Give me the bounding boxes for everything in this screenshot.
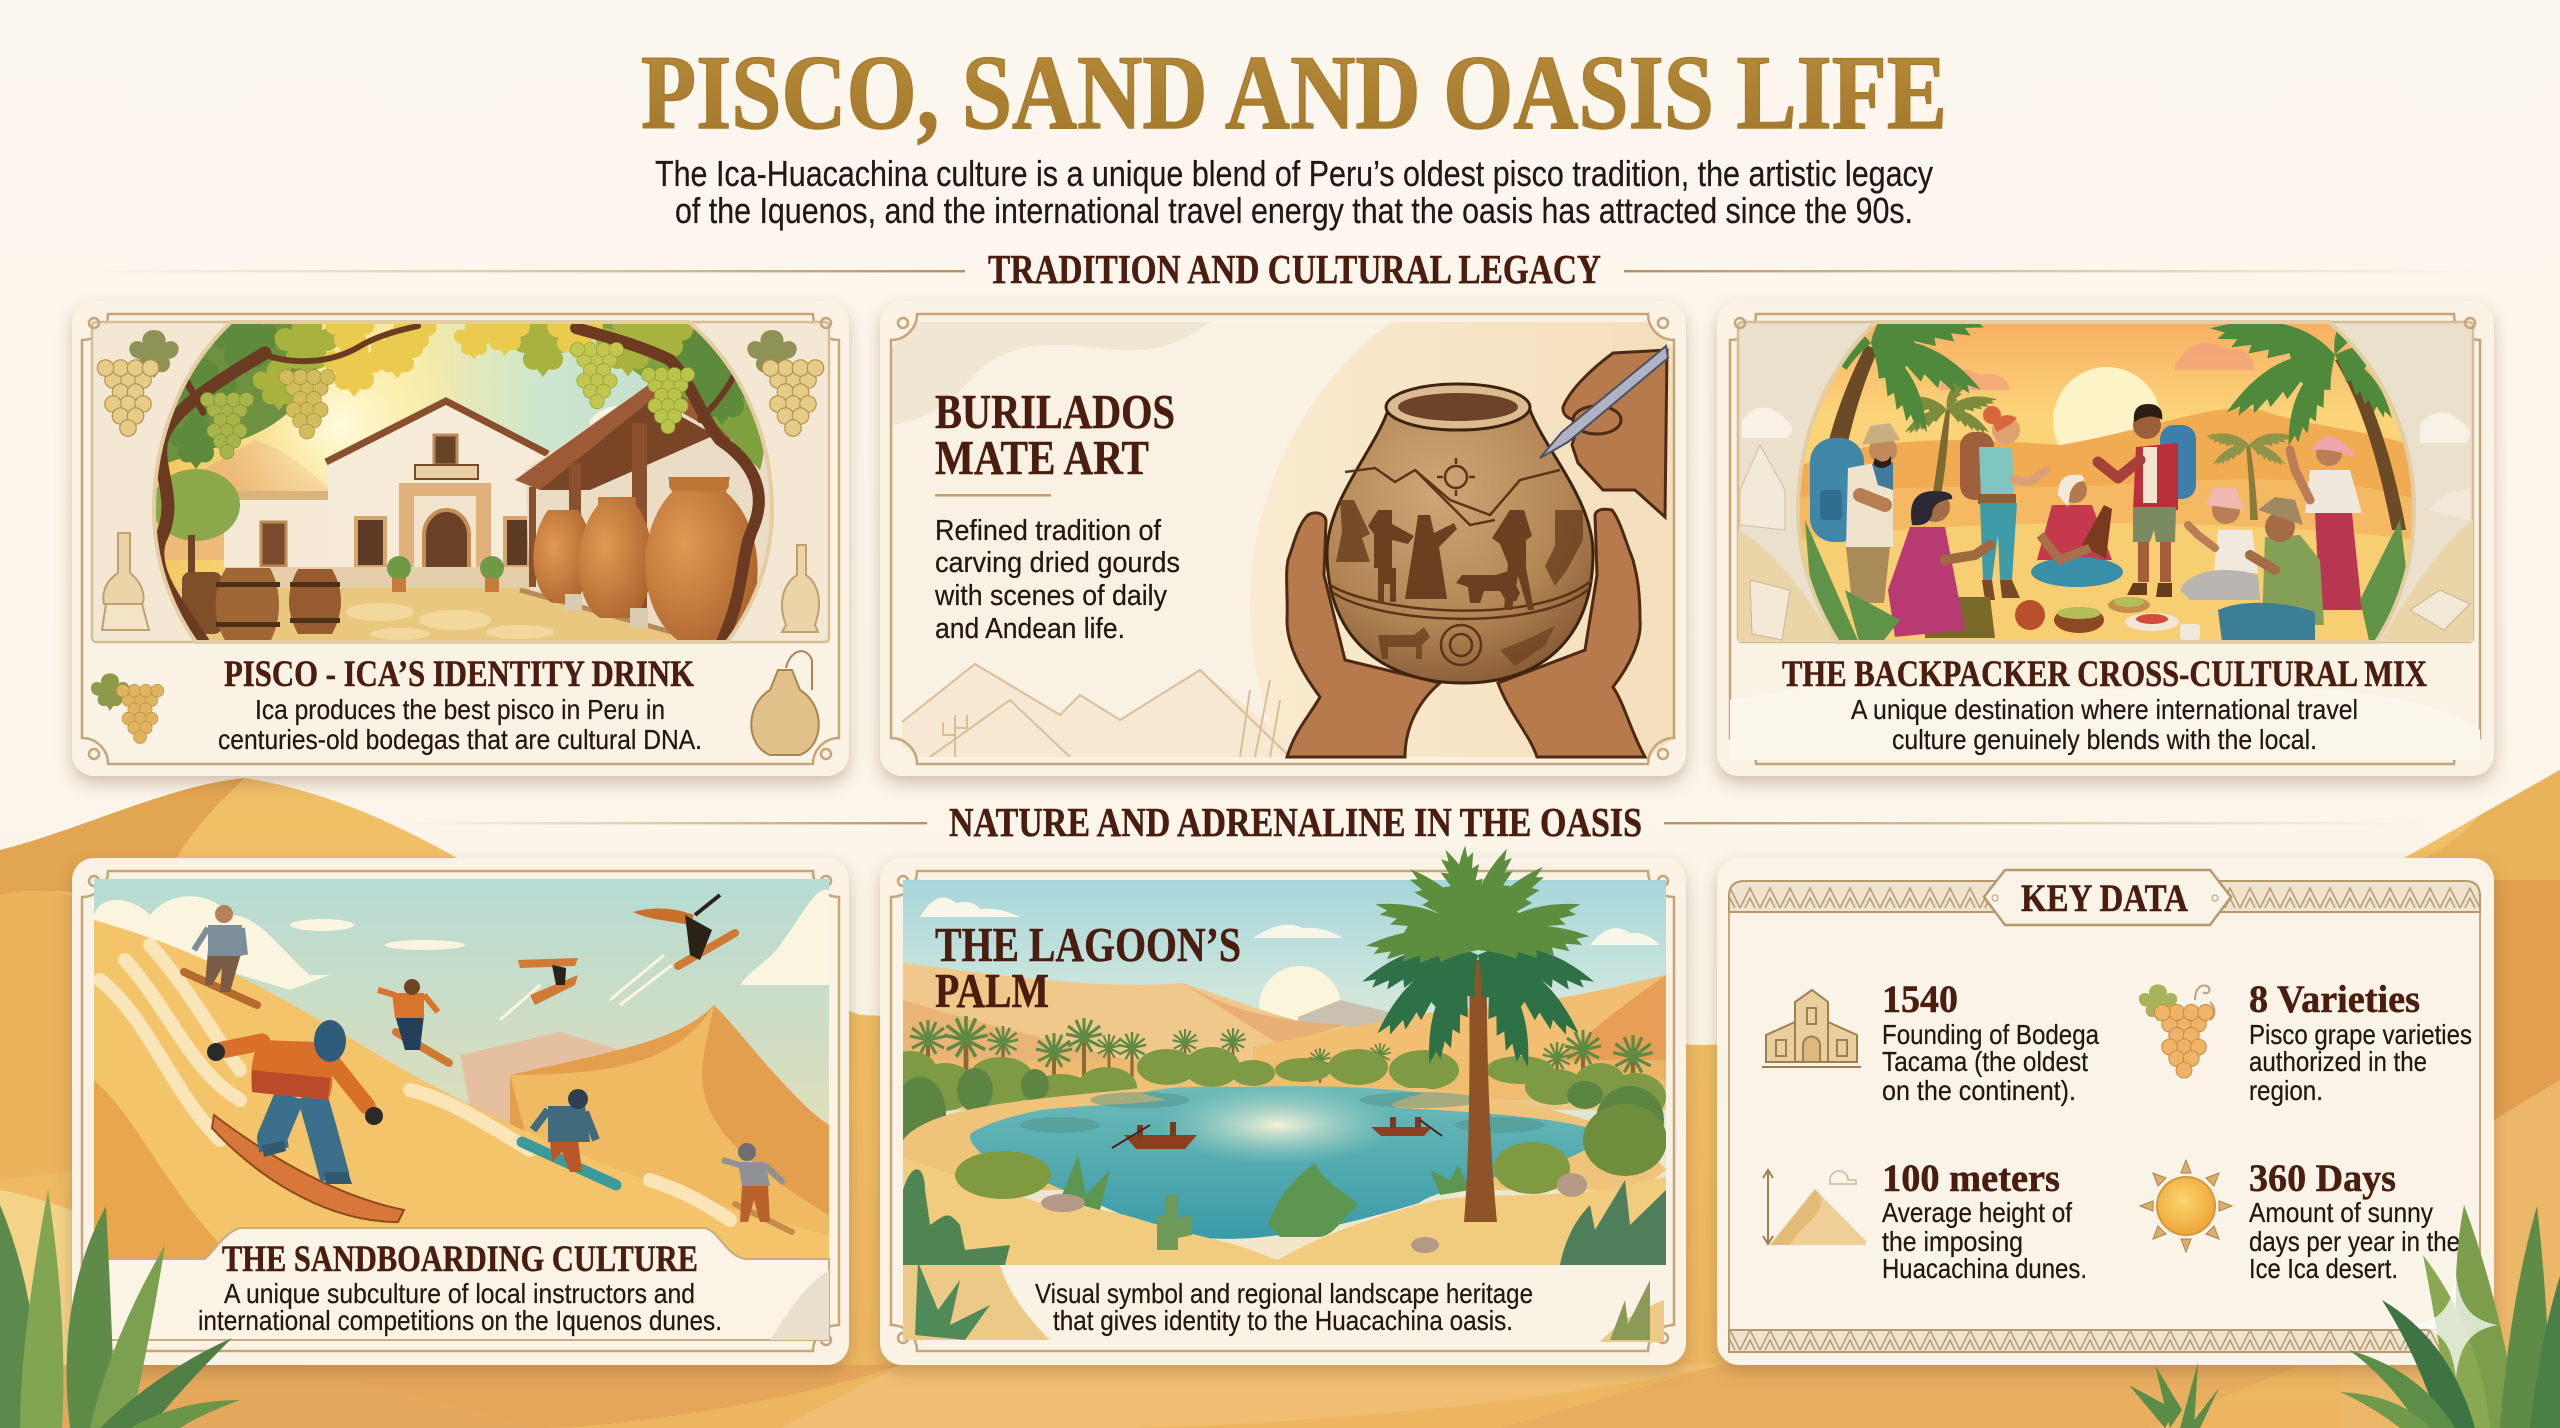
big palms: [1829, 324, 2406, 530]
body text: carving dried gourds: [935, 547, 1180, 579]
side alembics: [102, 533, 819, 632]
stat: 100 meters: Average height of: [1882, 1197, 2072, 1228]
card 2 frame: [891, 314, 1674, 764]
standing backpacker 1: [1810, 423, 1900, 603]
stat: 1540: Founding of Bodega: [1882, 1019, 2099, 1050]
caption: [218, 654, 702, 755]
standing man red jacket: [2098, 404, 2196, 597]
caption: Visual symbol and regional landscape heritage: [1035, 1278, 1533, 1309]
caption panel: [94, 1228, 829, 1340]
upper hand: [1563, 350, 1667, 517]
standing woman teal: [1960, 406, 2046, 600]
seated woman white: [2180, 488, 2260, 600]
vine trunks: [158, 326, 759, 642]
stat: 8 varieties: [2139, 978, 2472, 1106]
rider grey: [722, 1143, 792, 1232]
stat: 360 days: 360 Days: [2249, 1157, 2396, 1200]
caption: centuries-old bodegas that are cultural DNA.: [218, 724, 702, 755]
heading: BURILADOS: [935, 384, 1175, 439]
key data label: [1984, 870, 2231, 925]
stat: 1540: Tacama (the oldest: [1882, 1046, 2088, 1077]
stat: 8 varieties: authorized in the: [2249, 1046, 2427, 1077]
rider orange: [378, 979, 449, 1063]
body text: [934, 515, 1180, 645]
stat: 100 meters: 100 meters: [1882, 1157, 2060, 1200]
icon: engraving tool: [1540, 346, 1668, 458]
stat: 100 meters: the imposing: [1882, 1226, 2023, 1257]
card 1 frame: [82, 314, 839, 764]
heading: [935, 917, 1241, 1018]
boats: [1112, 1117, 1442, 1149]
icon: bodega: [1762, 990, 1861, 1067]
watermark sparkle: [2414, 1275, 2498, 1378]
hanging grapes: [200, 342, 695, 459]
subtitle: [655, 153, 1933, 231]
panel: key data: [1717, 858, 2494, 1365]
card 3 frame: [1730, 314, 2480, 764]
standing woman red skirt: [2290, 437, 2362, 610]
caption: Ica produces the best pisco in Peru in: [255, 694, 665, 725]
distant palms: [1905, 384, 2289, 520]
key data label: KEY DATA: [2021, 877, 2188, 920]
panel: sandboarding: [72, 858, 849, 1365]
section heading: tradition: TRADITION AND CULTURAL LEGACY: [988, 246, 1601, 292]
foreground plant left: [0, 1190, 240, 1428]
caption: A unique subculture of local instructors and: [224, 1278, 695, 1309]
foreground leaves: [1805, 520, 2410, 645]
stat: 360 days: Amount of sunny: [2249, 1197, 2433, 1228]
seated woman pink poncho: [1888, 491, 1995, 638]
caption: THE SANDBOARDING CULTURE: [222, 1239, 698, 1280]
panel: lagoon: [880, 844, 1686, 1365]
heading: THE LAGOON’S: [935, 917, 1241, 972]
carved gourd: [1327, 384, 1593, 683]
icon: grapes: [2139, 984, 2214, 1078]
foreground plant right: [2340, 1205, 2560, 1428]
caption: PISCO - ICA’S IDENTITY DRINK: [224, 654, 694, 695]
lagoon: [970, 1086, 1597, 1239]
barrels: [182, 568, 341, 642]
stat: 8 varieties: Pisco grape varieties: [2249, 1019, 2472, 1050]
card 2 art: [892, 322, 1673, 757]
stat: 100 meters: [1763, 1157, 2087, 1284]
foreground sand: [903, 1157, 1290, 1265]
jumping riders: [500, 895, 735, 1020]
panel: pisco: [72, 301, 849, 776]
section heading: nature: NATURE AND ADRENALINE IN THE OASIS: [949, 799, 1642, 845]
stat: 360 days: [2140, 1157, 2460, 1284]
main rider: [207, 1020, 404, 1222]
ornament bands: [1729, 881, 2480, 1352]
shared food: [2015, 597, 2200, 640]
stat: 8 varieties: 8 Varieties: [2249, 978, 2420, 1021]
stat: 100 meters: Huacachina dunes.: [1882, 1253, 2087, 1284]
card 4 frame: [82, 871, 839, 1351]
illustration: oasis: [882, 880, 1667, 1265]
side grapes decor: [97, 330, 824, 436]
subtitle: The Ica-Huacachina culture is a unique blend of Peru’s oldest pisco tradition, the artistic legacy: [655, 153, 1933, 194]
caption: international competitions on the Iquenos dunes.: [198, 1305, 722, 1336]
bodega building: [224, 401, 548, 590]
foreground plants: [903, 1104, 1667, 1265]
tree line: [882, 1016, 1666, 1190]
caption: A unique destination where international travel: [1851, 694, 2358, 725]
subtitle: of the Iquenos, and the international travel energy that the oasis has attracted since the 90s.: [675, 190, 1913, 231]
stat: 1540: on the continent).: [1882, 1075, 2076, 1106]
rider teal: [522, 1089, 616, 1185]
clay jars and porch: [515, 383, 790, 642]
seated man green: [2218, 497, 2324, 642]
title: PISCO, SAND AND OASIS LIFE: [641, 34, 1947, 151]
body text: with scenes of daily: [934, 580, 1167, 612]
icon: dune: [1763, 1170, 1866, 1245]
icon: grapes: [91, 673, 164, 744]
vine leaves: [167, 324, 764, 470]
caption: THE BACKPACKER CROSS-CULTURAL MIX: [1782, 654, 2427, 695]
caption: that gives identity to the Huacachina oasis.: [1053, 1305, 1513, 1336]
foreground plant bottom: [2129, 1362, 2219, 1428]
caption: [1782, 654, 2427, 755]
stat: 8 varieties: region.: [2249, 1075, 2323, 1106]
line art dunes: [902, 664, 1290, 757]
stat: 360 days: Ice Ica desert.: [2249, 1253, 2398, 1284]
panel: backpackers: [1717, 277, 2494, 776]
illustration: travellers: [1800, 324, 2412, 640]
heading: PALM: [935, 963, 1049, 1018]
seated man with instrument: [2031, 475, 2123, 587]
caption plants: [903, 1262, 1664, 1342]
stat: 1540: [1762, 978, 2099, 1106]
icon: alembic: [751, 651, 819, 755]
rider top: [184, 905, 257, 1005]
icon: sun: [2140, 1160, 2232, 1252]
caption banner: [1730, 677, 2480, 760]
caption: [198, 1239, 722, 1336]
body text: and Andean life.: [935, 613, 1125, 645]
illustration: bodega: [156, 324, 770, 640]
body text: Refined tradition of: [935, 515, 1162, 547]
illustration: dunes and riders: [94, 879, 829, 1264]
heading: [935, 384, 1175, 496]
hands: [1287, 509, 1645, 757]
palm tree: [1358, 844, 1598, 1222]
panel: burilados: [870, 298, 1696, 792]
caption: [1035, 1278, 1533, 1336]
card 5 frame: [891, 871, 1674, 1351]
side sketches: [1738, 408, 2473, 642]
heading: MATE ART: [935, 430, 1149, 485]
stat: 1540: 1540: [1882, 978, 1958, 1021]
stat: 360 days: days per year in the: [2249, 1226, 2460, 1257]
caption: culture genuinely blends with the local.: [1892, 724, 2317, 755]
